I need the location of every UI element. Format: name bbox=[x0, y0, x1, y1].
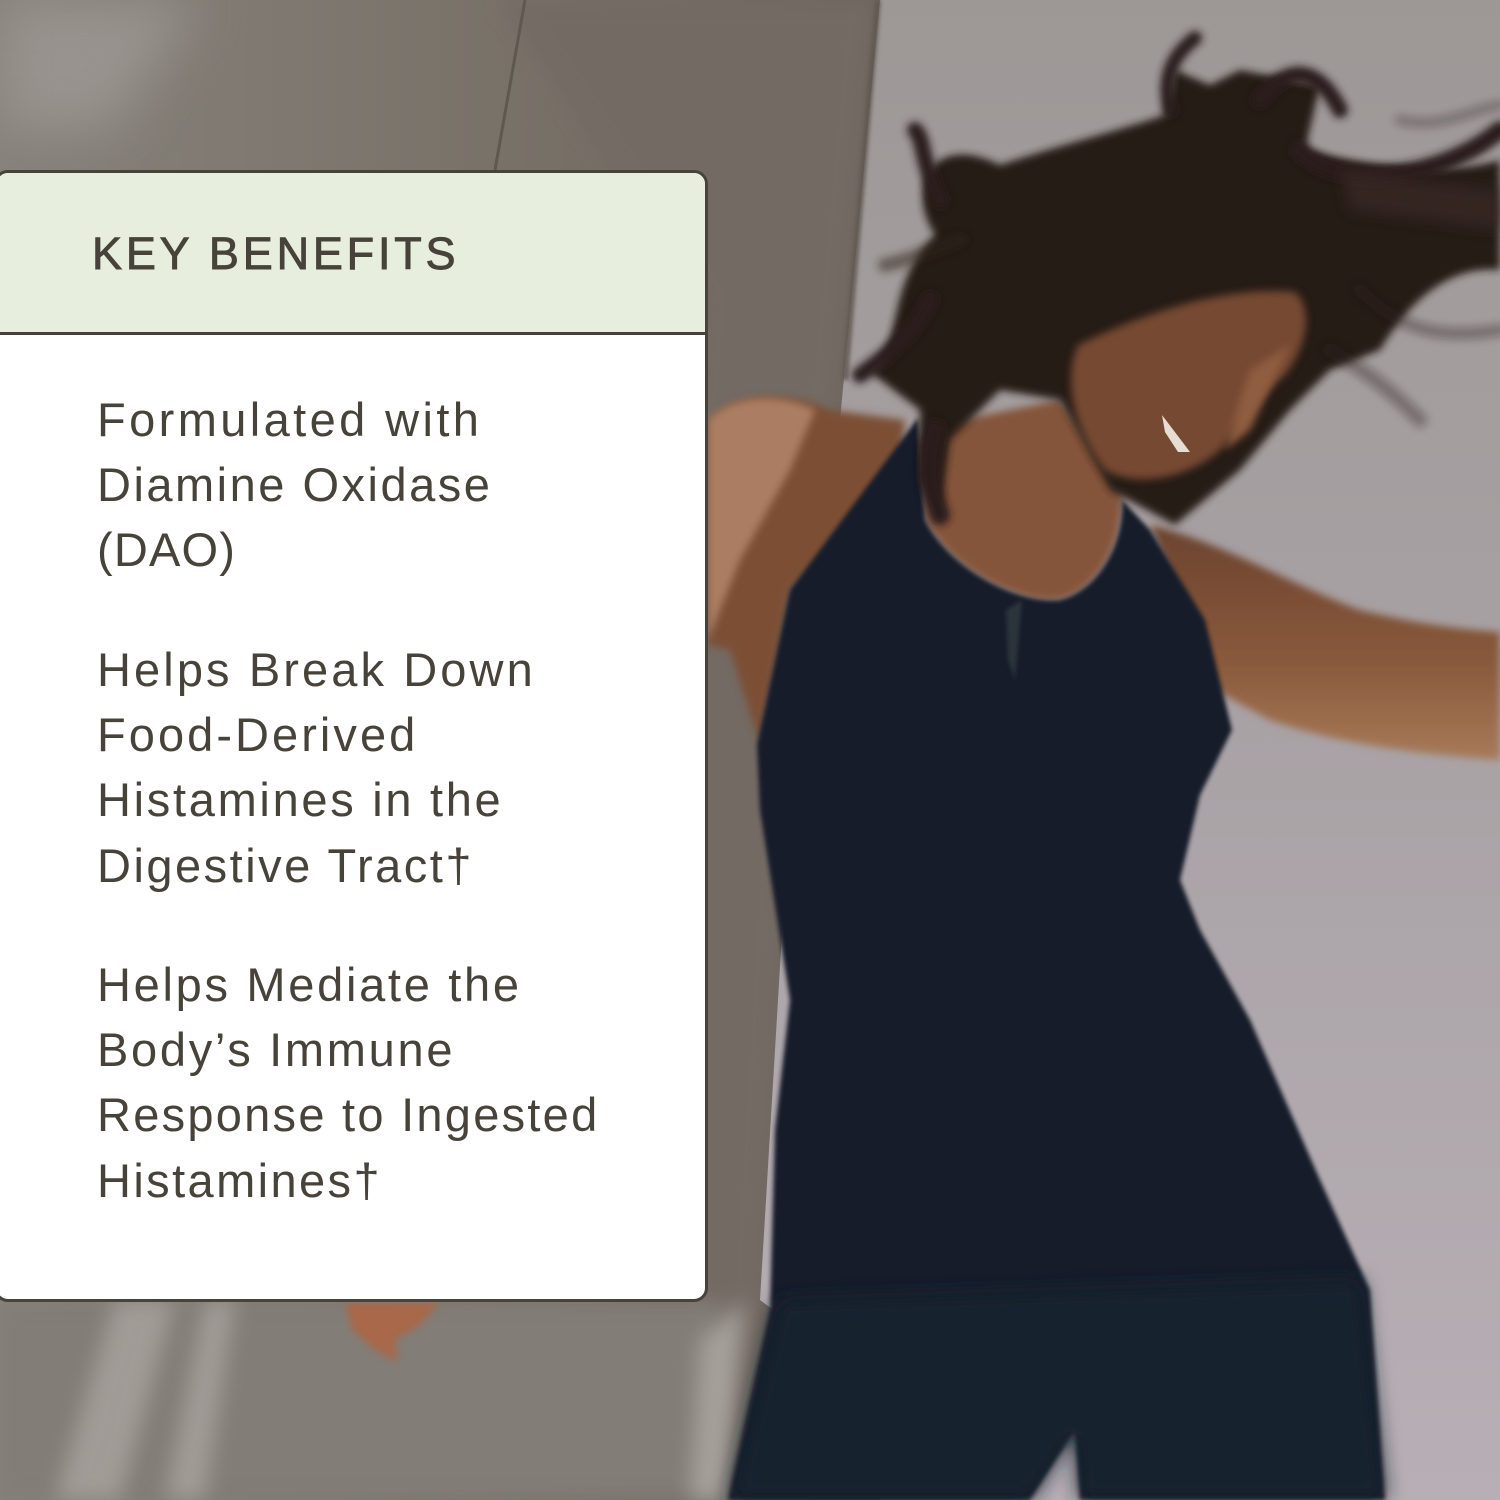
concrete wall left bbox=[0, 0, 880, 1500]
benefit: breaks down histamines: Food-Derived bbox=[97, 708, 418, 761]
benefit: breaks down histamines bbox=[97, 643, 536, 892]
benefit: immune response bbox=[97, 958, 599, 1207]
panel header band bbox=[0, 173, 705, 335]
benefit: DAO formula bbox=[97, 393, 492, 576]
woman's arms and chest bbox=[708, 397, 1500, 760]
benefit: DAO formula: Formulated with bbox=[97, 393, 482, 446]
navy jumpsuit bbox=[728, 418, 1385, 1500]
panel: key benefits card bbox=[0, 170, 708, 1302]
face bbox=[1071, 291, 1306, 479]
benefit: immune response: Response to Ingested bbox=[97, 1088, 599, 1141]
benefit: immune response: Body’s Immune bbox=[97, 1023, 455, 1076]
benefit: immune response: Histamines† bbox=[97, 1154, 382, 1207]
benefit: DAO formula: (DAO) bbox=[97, 523, 236, 576]
benefit: breaks down histamines: Digestive Tract† bbox=[97, 839, 474, 892]
heading: KEY BENEFITS bbox=[92, 228, 459, 279]
hand blur bbox=[345, 1302, 440, 1362]
benefit: breaks down histamines: Histamines in the bbox=[97, 773, 503, 826]
benefit: immune response: Helps Mediate the bbox=[97, 958, 522, 1011]
benefit: breaks down histamines: Helps Break Down bbox=[97, 643, 536, 696]
light wall right bbox=[760, 0, 1500, 1500]
hair bbox=[860, 38, 1500, 525]
benefit: DAO formula: Diamine Oxidase bbox=[97, 458, 492, 511]
